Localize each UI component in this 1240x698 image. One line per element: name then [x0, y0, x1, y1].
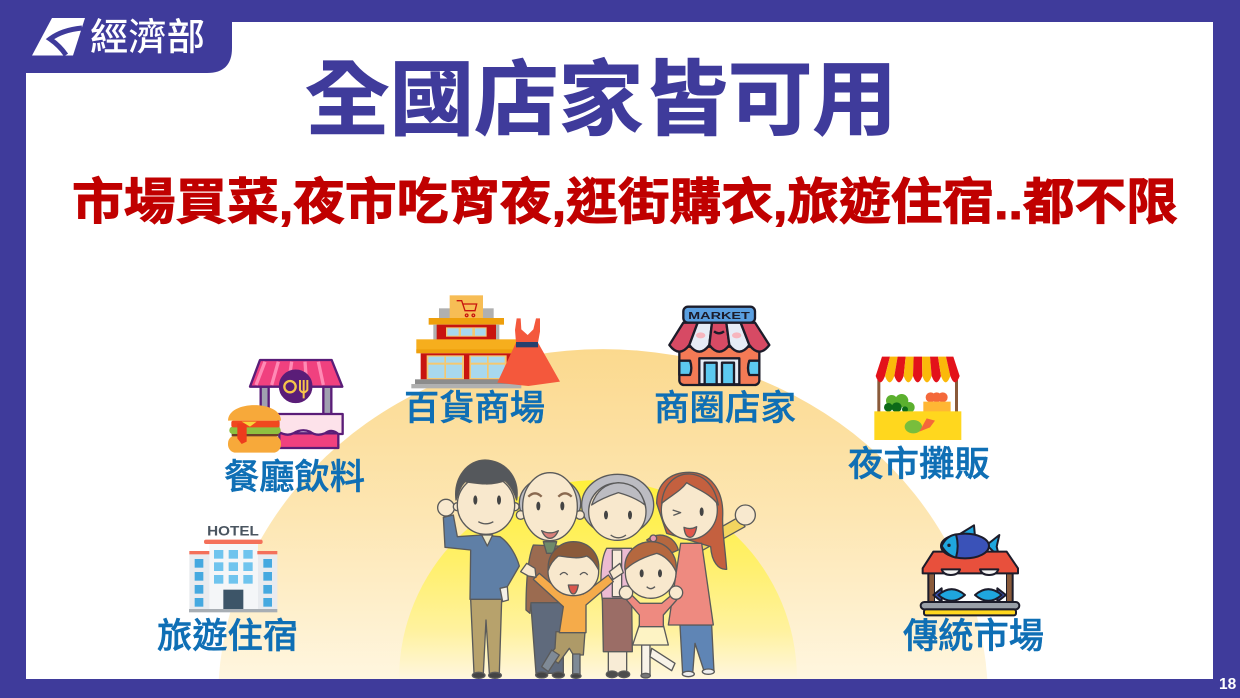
icon: night market stall: [874, 357, 961, 440]
icon: department store with dress: [411, 295, 560, 388]
icon: hotel: [189, 523, 277, 612]
title: 全國店家皆可用: [305, 55, 897, 146]
mother: [657, 472, 755, 677]
father: [438, 460, 519, 678]
logo wordmark: 經濟部: [90, 16, 205, 58]
subtitle: 市場買菜,夜市吃宵夜,逛街購衣,旅遊住宿..都不限: [72, 175, 1178, 230]
label: shopping district: 商圈店家: [654, 389, 796, 428]
label: restaurants and drinks: 餐廳飲料: [224, 458, 365, 497]
label: hotels: 旅遊住宿: [157, 617, 298, 656]
boy: [521, 542, 623, 678]
icon: fish market stall: [921, 525, 1019, 615]
icon: market shop: [669, 307, 769, 385]
page number: 18: [1219, 676, 1237, 693]
illustration: family: [438, 460, 755, 678]
logo tab: [26, 16, 232, 73]
icon: market shop: MARKET: [688, 311, 751, 322]
icon: hotel: HOTEL: [207, 523, 259, 539]
grandfather: [516, 473, 584, 678]
icon: ministry emblem: [32, 18, 85, 56]
label: night market stalls: 夜市攤販: [848, 445, 990, 484]
label: department store: 百貨商場: [404, 389, 545, 428]
grandma: [582, 474, 654, 678]
icon: food stall with burger: [228, 360, 343, 453]
girl: [619, 535, 683, 678]
label: traditional market: 傳統市場: [903, 617, 1044, 656]
semicircle background: [219, 349, 987, 679]
